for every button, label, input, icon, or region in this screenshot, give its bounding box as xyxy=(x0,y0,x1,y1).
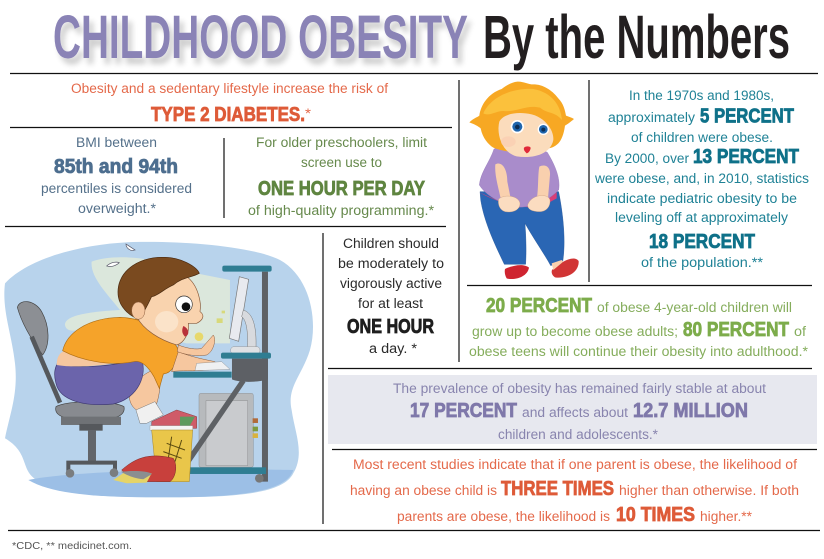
panel: 17 percent prevalence: and affects about xyxy=(522,405,628,420)
panel: parents risk: 10 TIMES xyxy=(616,504,695,526)
panel: BMI percentiles: overweight.* xyxy=(78,201,157,216)
panel: prevalence history: By 2000, over xyxy=(605,151,689,166)
panel: obese children become adults: of xyxy=(794,324,806,339)
panel: physical activity: Children should xyxy=(343,236,439,251)
panel: BMI percentiles xyxy=(41,135,192,216)
panel: physical activity: be moderately to xyxy=(338,256,444,271)
illustration: boy at computer xyxy=(4,242,313,497)
panel: physical activity xyxy=(338,236,444,356)
panel: screen use xyxy=(248,135,435,218)
panel: 17 percent prevalence: 17 PERCENT xyxy=(410,400,517,422)
panel: prevalence history: 18 PERCENT xyxy=(649,231,755,253)
panel: prevalence history: In the 1970s and 1980s, xyxy=(629,88,774,103)
panel: type 2 diabetes: Obesity and a sedentary lifestyle increase the risk of xyxy=(71,81,388,96)
panel: prevalence history: of children were obese. xyxy=(631,130,773,145)
shirt xyxy=(63,317,179,388)
panel: prevalence history: approximately xyxy=(608,110,695,125)
panel: screen use: ONE HOUR PER DAY xyxy=(258,178,426,200)
panel: prevalence history xyxy=(594,88,809,270)
panel: prevalence history: were obese, and, in 2010, statistics xyxy=(594,171,809,186)
panel: physical activity: for at least xyxy=(358,296,423,311)
panel: type 2 diabetes: TYPE 2 DIABETES. xyxy=(151,104,305,126)
panel: parents risk: having an obese child is xyxy=(350,483,497,498)
panel: prevalence history: 5 PERCENT xyxy=(700,106,794,128)
panel: 17 percent prevalence: 12.7 MILLION xyxy=(633,400,748,422)
shorts and leg xyxy=(129,369,160,413)
panel: BMI percentiles: percentiles is considered xyxy=(41,181,192,196)
panel: screen use: of high-quality programming.* xyxy=(248,203,435,218)
chair xyxy=(17,302,124,478)
panel: obese children become adults: grow up to become obese adults; xyxy=(472,324,678,339)
panel: parents risk xyxy=(350,457,799,526)
panel: screen use: For older preschoolers, limit xyxy=(256,135,427,150)
panel: prevalence history: indicate pediatric obesity to be xyxy=(607,191,797,206)
panel: parents risk: Most recent studies indicate that if one parent is obese, the likelihood of xyxy=(353,457,797,472)
panel: screen use: screen use to xyxy=(301,155,382,170)
panel: parents risk: higher than otherwise. If both xyxy=(619,483,799,498)
panel: physical activity: ONE HOUR xyxy=(347,316,434,338)
panel: obese children become adults: 80 PERCENT xyxy=(683,319,789,341)
panel: type 2 diabetes xyxy=(71,81,388,126)
panel: prevalence history: 13 PERCENT xyxy=(693,146,799,168)
source note: *CDC, ** medicinet.com. xyxy=(12,540,132,552)
panel: 17 percent prevalence: The prevalence of obesity has remained fairly stable at about xyxy=(393,381,766,396)
panel: prevalence history: leveling off at approximately xyxy=(615,210,788,225)
panel: parents risk: parents are obese, the likelihood is xyxy=(397,509,610,524)
panel: obese children become adults xyxy=(469,295,809,359)
panel: obese children become adults: obese teens will continue their obesity into adulthood.* xyxy=(469,344,809,359)
arms xyxy=(172,352,215,372)
panel: 17 percent prevalence: children and adolescents.* xyxy=(498,427,659,442)
head xyxy=(132,273,203,345)
panel: obese children become adults: 20 PERCENT xyxy=(486,295,592,317)
panel: parents risk: THREE TIMES xyxy=(501,478,614,500)
computer desk and monitor xyxy=(173,266,272,483)
panel: obese children become adults: of obese 4-year-old children will xyxy=(597,300,792,315)
panel: BMI percentiles: BMI between xyxy=(76,135,157,150)
panel: physical activity: a day. * xyxy=(369,341,418,356)
panel: BMI percentiles: 85th and 94th xyxy=(54,156,178,178)
panel: type 2 diabetes: * xyxy=(305,106,312,121)
snacks xyxy=(113,410,197,483)
panel: parents risk: higher.** xyxy=(700,509,753,524)
panel: physical activity: vigorously active xyxy=(340,276,442,291)
title: CHILDHOOD OBESITY xyxy=(53,3,468,71)
panel: prevalence history: of the population.** xyxy=(641,255,764,270)
panel: 17 percent prevalence xyxy=(328,375,817,444)
illustration: girl tugging at jeans xyxy=(469,82,579,279)
